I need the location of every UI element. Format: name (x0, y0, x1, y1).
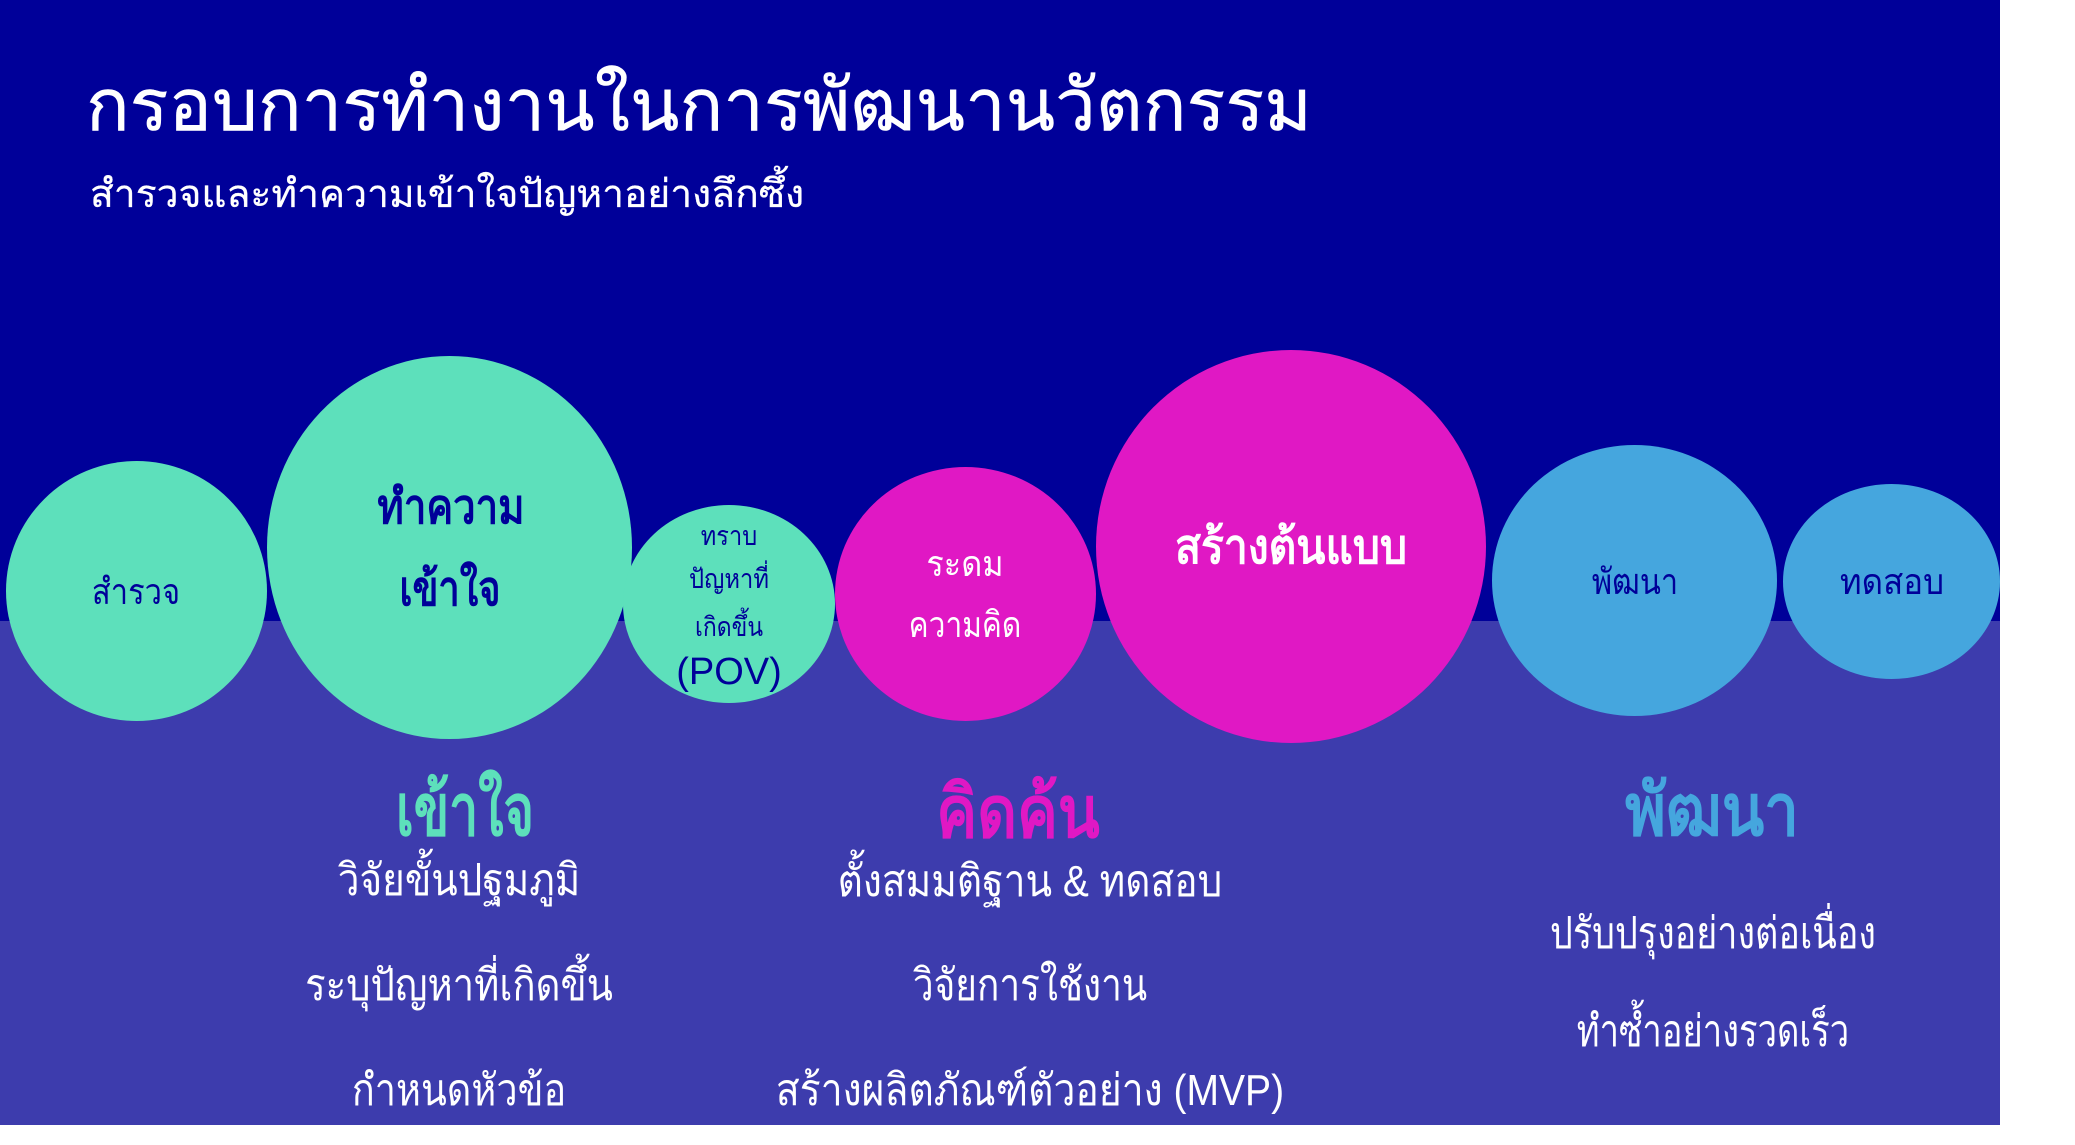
label: develop: พัฒนา (1592, 561, 1678, 602)
label: understand line 1: ทำความ (377, 481, 525, 534)
list: ideate (776, 850, 1284, 1115)
item: สร้างผลิตภัณฑ์ตัวอย่าง (MVP) (776, 1066, 1284, 1115)
label: ideate line 2: ความคิด (909, 604, 1021, 645)
bottom background band (0, 621, 2000, 1125)
heading: develop: พัฒนา (1625, 771, 1799, 851)
list: develop (1550, 903, 1876, 1056)
heading: ideate: คิดค้น (936, 773, 1100, 853)
circle: develop (1492, 445, 1777, 716)
circle: prototype (1096, 350, 1486, 743)
subtitle: สำรวจและทำความเข้าใจปัญหาอย่างลึกซึ้ง (90, 173, 804, 216)
item: วิจัยขั้นปฐมภูมิ (338, 856, 580, 905)
item: ทำซ้ำอย่างรวดเร็ว (1577, 1007, 1849, 1056)
label: understand line 2: เข้าใจ (400, 563, 500, 616)
item: วิจัยการใช้งาน (913, 961, 1147, 1010)
circle: ideate (835, 467, 1096, 721)
circle: understand (267, 356, 632, 739)
label: test: ทดสอบ (1840, 561, 1944, 602)
label: prototype: สร้างต้นแบบ (1175, 521, 1407, 574)
circle: test (1783, 484, 2000, 679)
item: กำหนดหัวข้อ (352, 1066, 566, 1115)
title: กรอบการทำงานในการพัฒนานวัตกรรม (86, 66, 1312, 146)
label: POV line 1: ทราบ (701, 521, 757, 551)
item: ตั้งสมมติฐาน & ทดสอบ (838, 857, 1222, 906)
circle: explore (6, 461, 267, 721)
list: understand (305, 848, 613, 1115)
heading: understand: เข้าใจ (396, 771, 534, 851)
item: ระบุปัญหาที่เกิดขึ้น (305, 961, 613, 1010)
circle: point of view (623, 505, 835, 703)
item: ปรับปรุงอย่างต่อเนื่อง (1550, 909, 1876, 958)
label: POV line 4: (POV) (676, 651, 782, 693)
label: POV line 2: ปัญหาที่ (689, 564, 769, 594)
label: POV line 3: เกิดขึ้น (695, 612, 763, 642)
label: explore: สำรวจ (92, 571, 180, 612)
top background band (0, 0, 2000, 621)
label: ideate line 1: ระดม (926, 543, 1004, 584)
